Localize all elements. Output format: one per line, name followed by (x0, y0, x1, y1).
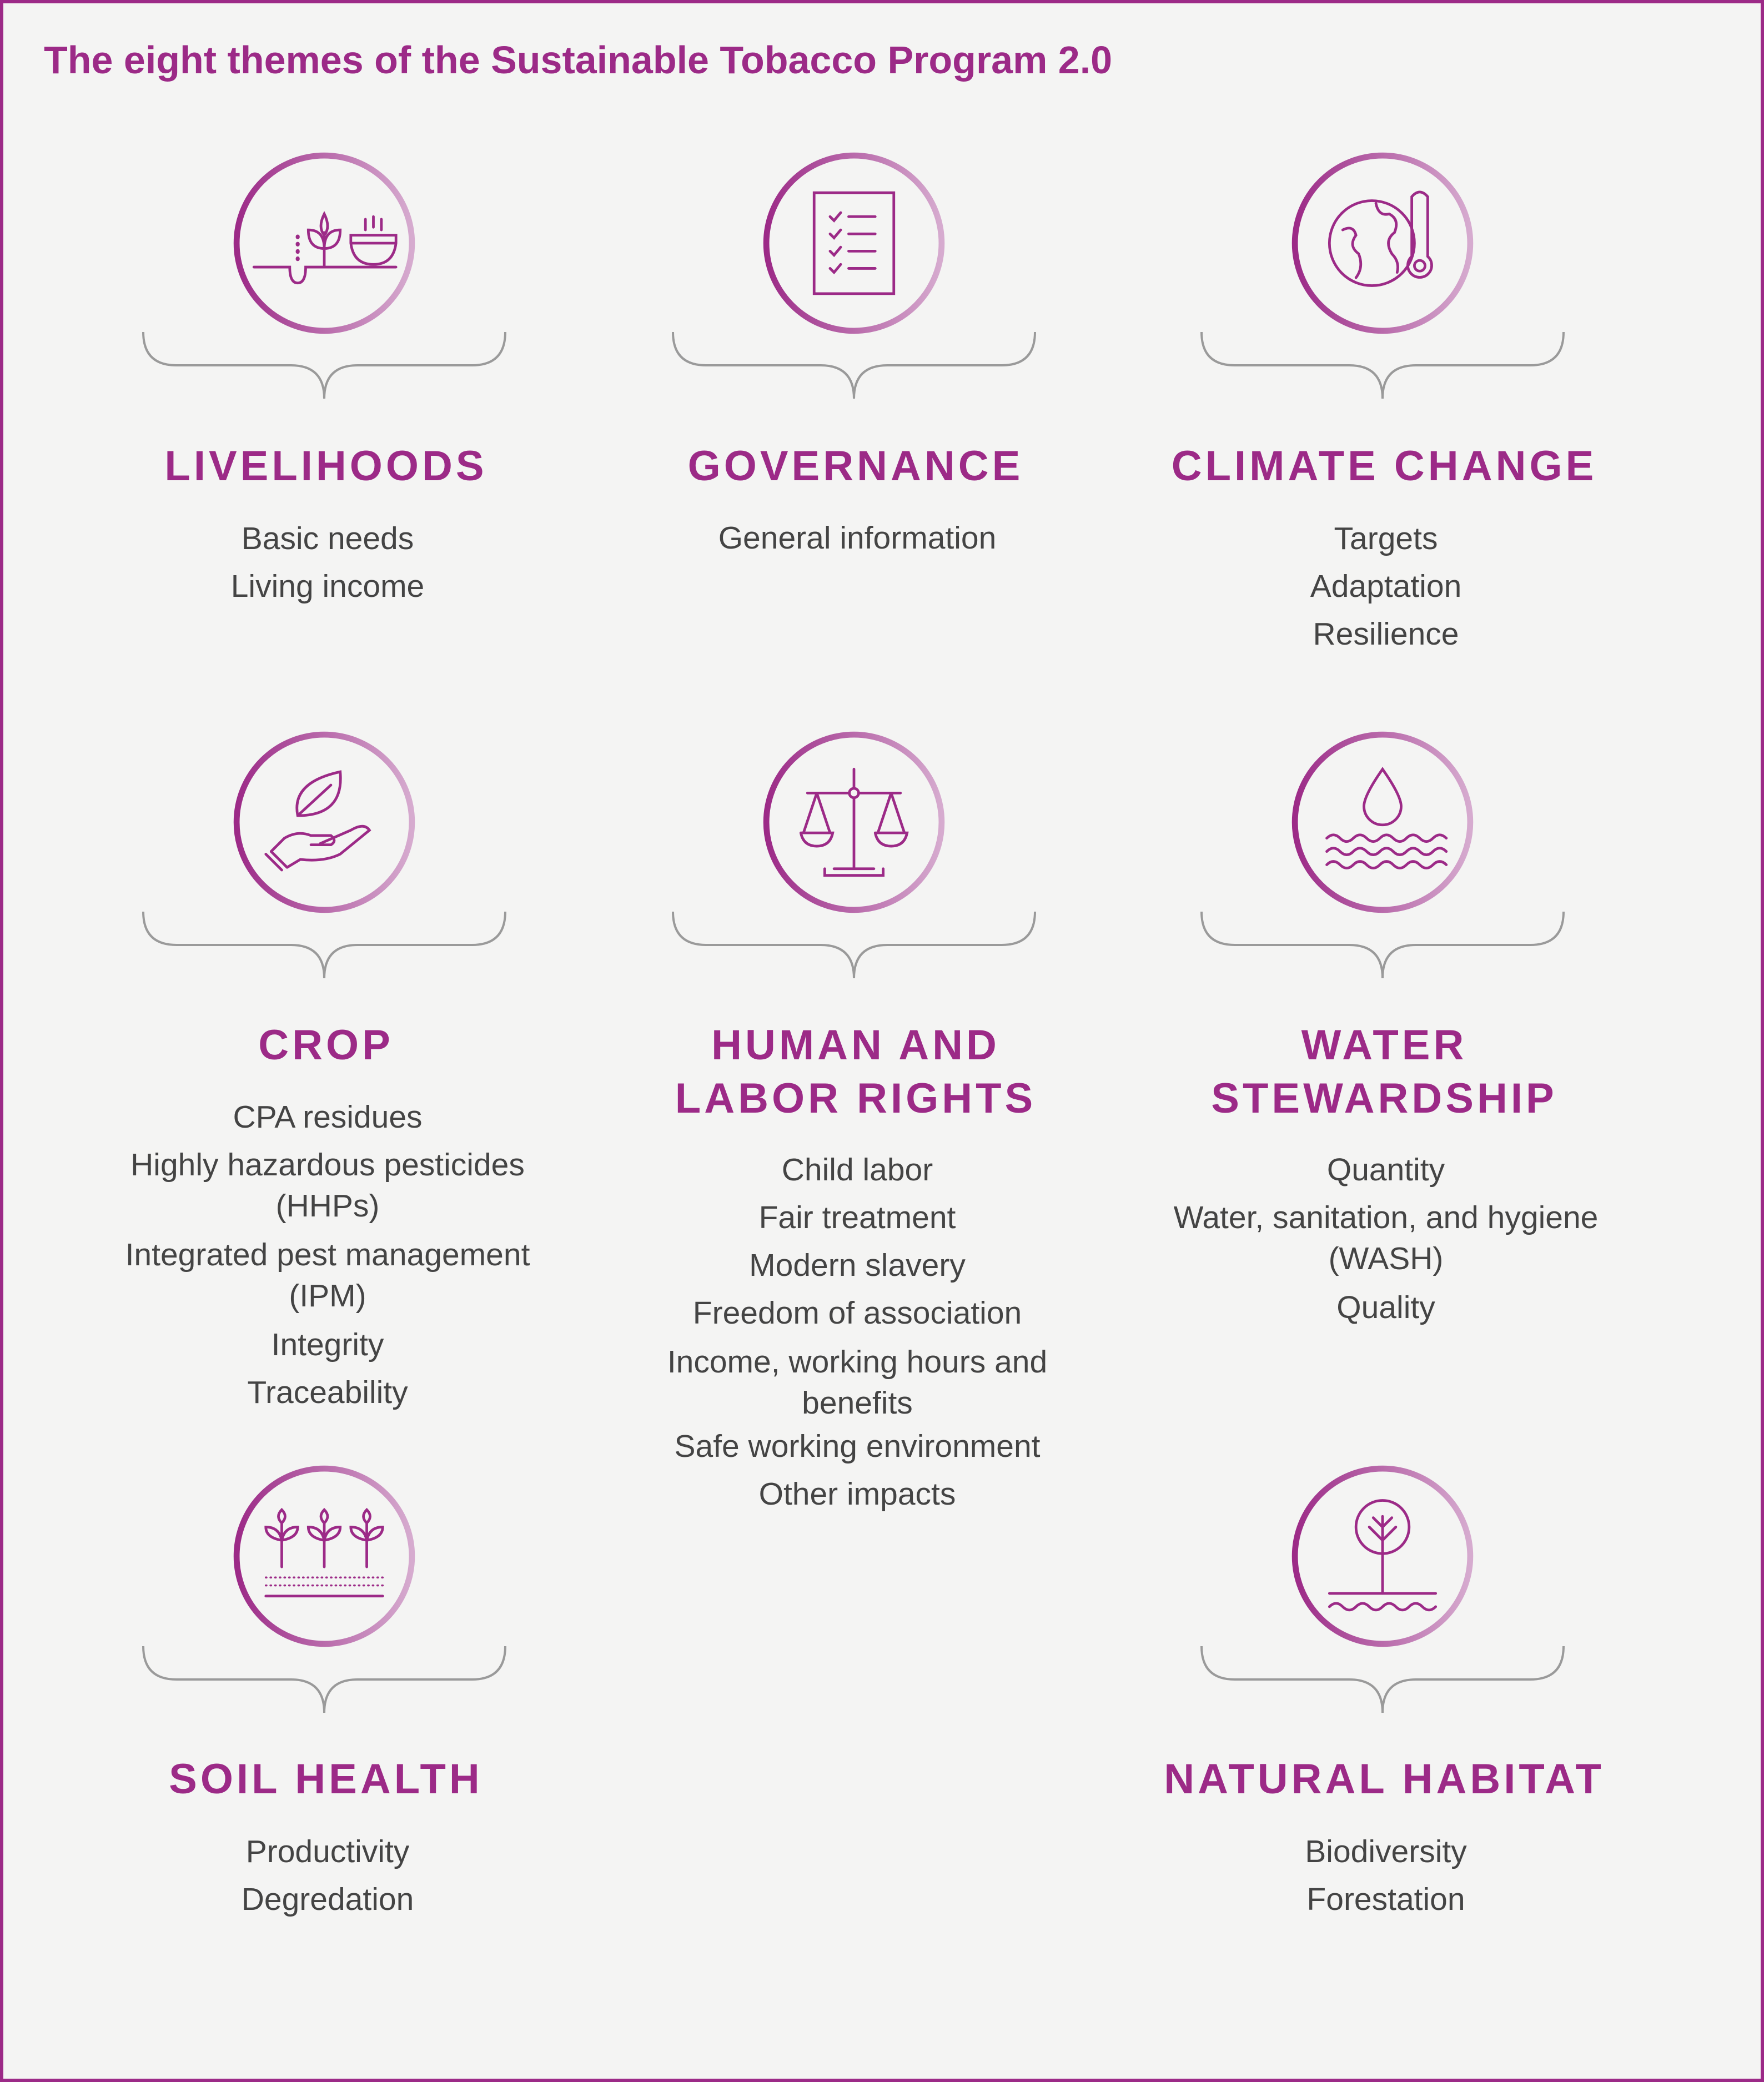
text: human rights: Safe working environment (674, 1429, 1041, 1464)
icon: soil (237, 1469, 412, 1644)
text: soil: Degredation (242, 1882, 414, 1917)
text: habitat: Biodiversity (1305, 1834, 1467, 1869)
text: human rights (667, 1152, 1047, 1512)
heading: human rights: LABOR RIGHTS (675, 1075, 1036, 1122)
text: habitat (1305, 1834, 1467, 1917)
text: water: Quality (1336, 1290, 1435, 1325)
text: water: Quantity (1327, 1152, 1445, 1188)
text: livelihoods: Basic needs (242, 521, 414, 556)
text: human rights: Income, working hours and (667, 1344, 1047, 1380)
icon: climate (1295, 155, 1470, 331)
icon: crop (237, 735, 412, 910)
text: crop: (HHPs) (276, 1188, 379, 1224)
text: climate: Adaptation (1310, 569, 1461, 604)
text: crop: (IPM) (289, 1278, 366, 1314)
icon: water (1295, 735, 1470, 910)
text: human rights: Child labor (782, 1152, 933, 1188)
text: human rights: Fair treatment (759, 1200, 956, 1235)
text: human rights: benefits (802, 1385, 913, 1421)
text: governance: General information (718, 520, 996, 556)
heading: livelihoods: LIVELIHOODS (164, 442, 488, 490)
heading: water: STEWARDSHIP (1211, 1075, 1557, 1122)
text: soil (242, 1834, 414, 1917)
text: water: Water, sanitation, and hygiene (1174, 1200, 1598, 1235)
text: climate: Targets (1334, 521, 1438, 556)
heading: governance: GOVERNANCE (688, 442, 1023, 490)
text: crop (125, 1099, 530, 1410)
icon: livelihoods (237, 155, 412, 331)
text: water: (WASH) (1329, 1241, 1443, 1276)
heading: habitat: NATURAL HABITAT (1164, 1756, 1605, 1803)
text: crop: Traceability (247, 1375, 408, 1410)
text: climate: Resilience (1313, 616, 1459, 652)
text: crop: CPA residues (233, 1099, 423, 1135)
text: human rights: Modern slavery (749, 1248, 966, 1283)
heading: water (1211, 1022, 1557, 1122)
heading: soil: SOIL HEALTH (169, 1756, 483, 1803)
text: water (1174, 1152, 1598, 1325)
text: human rights: Freedom of association (693, 1295, 1022, 1331)
heading: water: WATER (1301, 1022, 1467, 1069)
text: livelihoods (231, 521, 424, 604)
text: human rights: Other impacts (759, 1476, 956, 1512)
heading: human rights (675, 1022, 1036, 1122)
icon: human rights (766, 735, 942, 910)
text: crop: Highly hazardous pesticides (130, 1147, 525, 1183)
text: crop: Integrated pest management (125, 1237, 530, 1273)
heading: human rights: HUMAN AND (711, 1022, 1000, 1069)
title: The eight themes of the Sustainable Tobacco Program 2.0 (44, 38, 1112, 82)
text: crop: Integrity (272, 1327, 384, 1362)
icon: governance (766, 155, 942, 331)
text: habitat: Forestation (1306, 1882, 1465, 1917)
icon: habitat (1295, 1469, 1470, 1644)
heading: climate: CLIMATE CHANGE (1172, 442, 1597, 490)
text: livelihoods: Living income (231, 569, 424, 604)
braces (143, 332, 1564, 1713)
text: soil: Productivity (246, 1834, 409, 1869)
text: climate (1310, 521, 1461, 652)
heading: crop: CROP (258, 1022, 394, 1069)
